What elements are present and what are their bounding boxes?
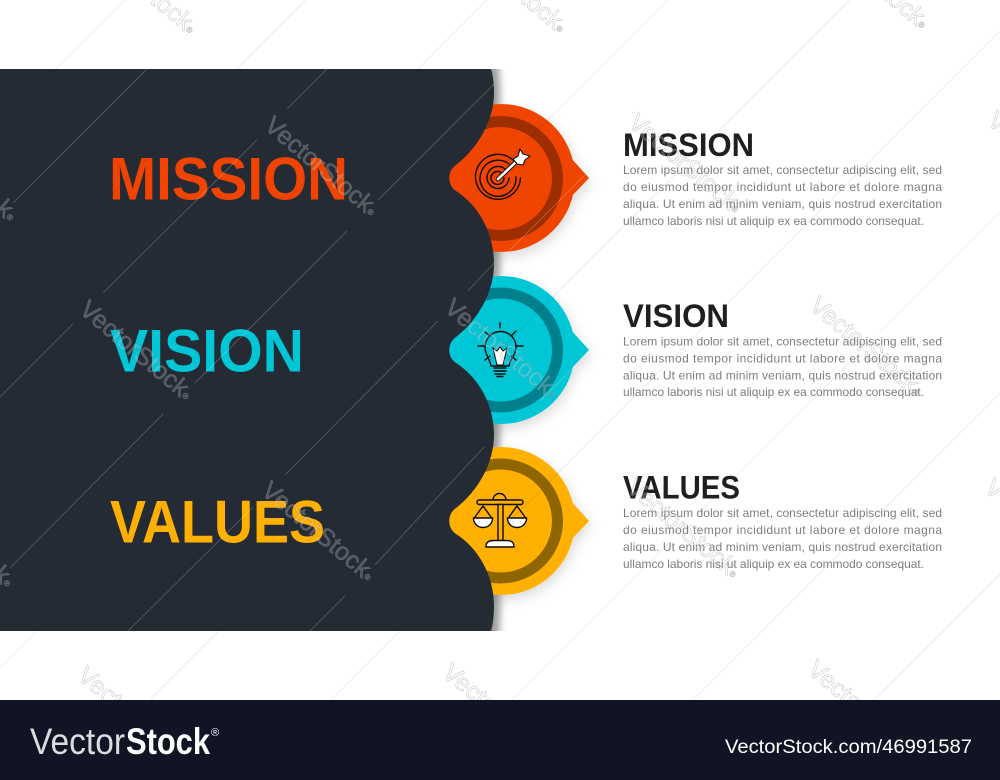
watermark: repeated VectorStock stamps: ® [2, 578, 12, 589]
heading: vision: VISION [623, 298, 729, 334]
paragraph: mission: Lorem ipsum dolor sit amet, consectetur adipiscing elit, sed [623, 163, 942, 177]
watermark: repeated VectorStock stamps: Vecto [437, 658, 503, 720]
icon: balance scales [474, 494, 526, 547]
paragraph: values: do eiusmod tempor incididunt ut labore et dolore magna [623, 523, 942, 537]
paragraph: mission [623, 163, 942, 228]
badge: vision [427, 276, 589, 424]
watermark: repeated VectorStock stamps: ® [545, 389, 556, 400]
watermark: repeated VectorStock stamps: VectorStock [439, 293, 559, 400]
badge: mission [427, 104, 589, 252]
icon: light bulb [478, 323, 523, 376]
footer banner [0, 700, 1000, 780]
watermark: repeated VectorStock stamps: VectorStock [623, 108, 743, 215]
text block: mission [623, 127, 942, 228]
watermark: repeated VectorStock stamps: ® [184, 25, 195, 35]
paragraph: vision [623, 334, 942, 399]
watermark: repeated VectorStock stamps: ® [180, 391, 191, 402]
watermark: repeated VectorStock stamps: Vecto [72, 661, 138, 723]
paragraph: vision: aliqua. Ut enim ad minim veniam, quis nostrud exercitation [623, 368, 942, 382]
watermark: repeated VectorStock stamps: ® [729, 204, 740, 215]
watermark: repeated VectorStock stamps: ® [5, 212, 15, 223]
watermark: repeated VectorStock stamps: ® [910, 387, 921, 398]
dark panel shadow [491, 69, 505, 631]
paragraph: values: Lorem ipsum dolor sit amet, consectetur adipiscing elit, sed [623, 506, 942, 520]
paragraph: mission: ullamco laboris nisi ut aliquip ex ea commodo consequat. [623, 214, 924, 228]
watermark: repeated VectorStock stamps: Vecto [802, 655, 868, 717]
watermark: repeated VectorStock stamps: VectorStock [804, 291, 924, 398]
badge: values [427, 447, 589, 595]
watermark: repeated VectorStock stamps: ® [727, 569, 738, 580]
heading: mission: MISSION [623, 127, 754, 163]
icon: target with arrow [476, 149, 530, 199]
watermark: repeated VectorStock stamps: ® [365, 207, 376, 218]
paragraph: vision: ullamco laboris nisi ut aliquip ex ea commodo consequat. [623, 385, 924, 399]
watermark: repeated VectorStock stamps: VectorStock [74, 295, 194, 402]
panel title: values: VALUES [110, 488, 325, 556]
paragraph: vision: Lorem ipsum dolor sit amet, consectetur adipiscing elit, sed [623, 334, 942, 348]
watermark: repeated VectorStock stamps: ® [916, 20, 927, 30]
watermark: repeated VectorStock stamps: VectorStock [259, 111, 379, 218]
watermark: repeated VectorStock stamps: ® [362, 572, 373, 583]
text block: vision [623, 298, 942, 399]
watermark: repeated VectorStock stamps: VectorStock [621, 473, 741, 580]
panel title: mission: MISSION [109, 146, 348, 212]
footer logo: Vector [30, 721, 125, 762]
dark scalloped panel [0, 69, 494, 631]
watermark: repeated VectorStock stamps: ® [554, 24, 565, 34]
watermark: repeated VectorStock stamps: VectorStock [256, 476, 376, 583]
paragraph: values [623, 506, 942, 571]
paragraph: vision: do eiusmod tempor incididunt ut labore et dolore magna [623, 352, 942, 366]
paragraph: values: aliqua. Ut enim ad minim veniam, quis nostrud exercitation [623, 540, 942, 554]
footer banner: Stock [126, 721, 210, 762]
heading: values: VALUES [623, 470, 740, 506]
footer url: VectorStock.com/46991587 [725, 736, 972, 758]
text block: values [623, 470, 942, 571]
footer banner: ® [211, 727, 219, 739]
paragraph: mission: do eiusmod tempor incididunt ut labore et dolore magna [623, 180, 942, 194]
panel title: vision: VISION [110, 318, 304, 384]
paragraph: mission: aliqua. Ut enim ad minim veniam, quis nostrud exercitation [623, 197, 942, 211]
paragraph: values: ullamco laboris nisi ut aliquip ex ea commodo consequat. [623, 557, 924, 571]
